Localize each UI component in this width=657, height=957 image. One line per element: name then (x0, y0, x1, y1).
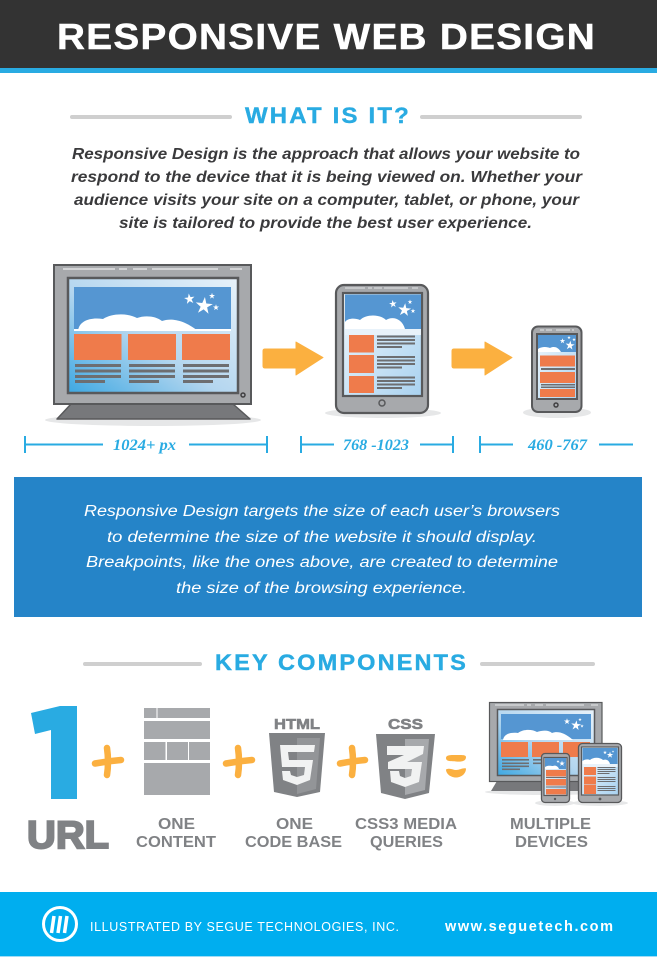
breakpoint: 460-767 (480, 436, 633, 454)
label: css3 media queries: QUERIES (370, 834, 443, 851)
icon: content blocks (144, 708, 210, 795)
label: URL: URL (27, 814, 109, 857)
intro paragraph: Responsive Design is the approach that allows your website to (72, 146, 580, 163)
breakpoint: 460-767: 460 -767 (527, 437, 588, 454)
icon: HTML5 shield: HTML (274, 716, 320, 733)
panel: breakpoints explanation: to determine the size of the website it should display. (107, 529, 537, 546)
arrow: tablet to phone (452, 342, 512, 375)
label: multiple devices (510, 816, 591, 851)
label: multiple devices: DEVICES (515, 834, 588, 851)
icon: plus (95, 748, 121, 775)
intro paragraph: respond to the device that it is being viewed on. Whether your (71, 169, 583, 186)
label: one code base (245, 816, 342, 851)
footer website: www.seguetech.com (444, 919, 613, 935)
heading: key components: KEY COMPONENTS (215, 650, 468, 675)
intro paragraph (71, 146, 583, 232)
mini phone (542, 754, 570, 802)
label: one content: CONTENT (136, 834, 217, 851)
mini tablet (578, 744, 622, 802)
breakpoint: 768-1023: 768 -1023 (343, 437, 409, 454)
label: css3 media queries: CSS3 MEDIA (355, 816, 457, 833)
icon: tablet (325, 285, 441, 418)
icon: CSS3 shield: CSS (388, 716, 423, 733)
icon: desktop monitor (45, 265, 261, 426)
header banner (0, 0, 657, 73)
title: RESPONSIVE WEB DESIGN (57, 16, 596, 57)
icon: HTML5 shield (269, 716, 325, 797)
heading: what is it (70, 103, 582, 128)
breakpoint: 768-1023 (301, 436, 453, 454)
intro paragraph: audience visits your site on a computer, tablet, or phone, your (74, 192, 580, 209)
panel: breakpoints explanation: Breakpoints, like the ones above, are created to determine (86, 554, 558, 571)
panel: breakpoints explanation (14, 477, 642, 617)
icon: plus (340, 748, 365, 775)
label: one code base: ONE (276, 816, 313, 833)
icon: phone (523, 326, 591, 418)
intro paragraph: site is tailored to provide the best user experience. (119, 215, 532, 232)
icon: multiple devices (485, 702, 628, 806)
mini monitor (490, 702, 602, 791)
icon: segue logo (44, 908, 76, 940)
footer (0, 892, 657, 957)
footer credit: ILLUSTRATED BY SEGUE TECHNOLOGIES, INC. (90, 920, 399, 934)
breakpoint: 1024+ px: 1024+ px (113, 437, 176, 454)
icon: plus (226, 748, 252, 775)
arrow: desktop to tablet (263, 342, 323, 375)
label: one content: ONE (158, 816, 195, 833)
icon: numeral 1 (31, 706, 77, 799)
label: one code base: CODE BASE (245, 834, 342, 851)
breakpoint: 1024+ px (25, 436, 267, 454)
label: css3 media queries (355, 816, 457, 851)
heading: what is it: WHAT IS IT? (245, 103, 411, 128)
panel: breakpoints explanation: Responsive Design targets the size of each user’s browsers (84, 503, 560, 520)
label: multiple devices: MULTIPLE (510, 816, 591, 833)
icon: CSS3 shield (376, 716, 435, 799)
panel: breakpoints explanation: the size of the browsing experience. (176, 580, 467, 597)
label: one content (136, 816, 217, 851)
icon: equals (446, 755, 466, 778)
heading: key components (83, 650, 595, 675)
